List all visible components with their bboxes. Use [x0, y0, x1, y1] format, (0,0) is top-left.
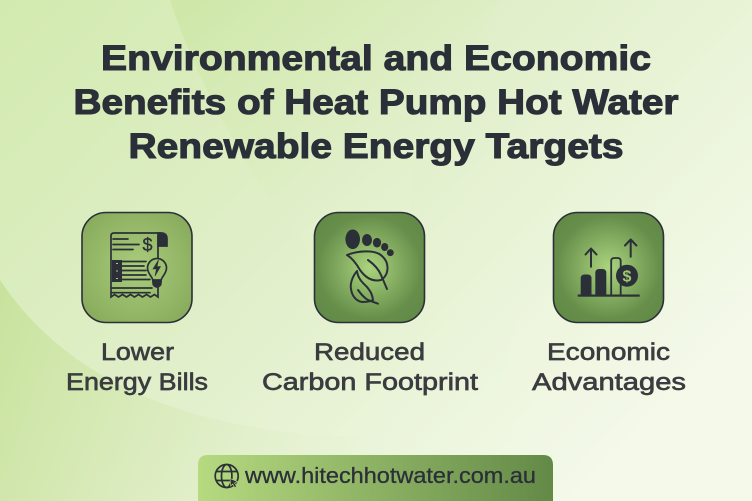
label: [262, 339, 478, 396]
label: Advantages: [532, 369, 686, 396]
icon card: footprint and leaves: [314, 212, 424, 322]
website url: www.hitechhotwater.com.au: [244, 463, 536, 488]
title: Environmental and Economic: [101, 39, 651, 78]
label: [532, 339, 686, 396]
icon card: receipt and bulb: [82, 212, 192, 322]
label: Reduced: [314, 339, 425, 366]
label: Economic: [547, 339, 670, 366]
footer website bar: [198, 455, 553, 501]
icon: leaves: [347, 251, 388, 304]
icon: receipt with lightbulb: [111, 233, 167, 297]
title: [74, 39, 679, 166]
title: Benefits of Heat Pump Hot Water: [74, 83, 679, 122]
icon card: growth chart: [554, 212, 664, 322]
label: Energy Bills: [66, 369, 208, 396]
label: Lower: [101, 339, 174, 366]
label: [66, 339, 208, 396]
icon card: growth chart: $: [623, 268, 632, 286]
panel: economic advantages: [532, 212, 686, 396]
icon: toes: [345, 230, 394, 256]
icon: bars: [578, 269, 640, 297]
icon: globe with cursor: [215, 464, 238, 488]
icon: arrows: [586, 240, 636, 267]
label: Carbon Footprint: [262, 369, 478, 396]
icon: coin: [616, 265, 638, 287]
panel: lower energy bills: [66, 212, 208, 396]
panel: reduced carbon footprint: [262, 212, 478, 396]
title: Renewable Energy Targets: [128, 127, 624, 166]
icon: dollar sign: $: [142, 235, 153, 255]
